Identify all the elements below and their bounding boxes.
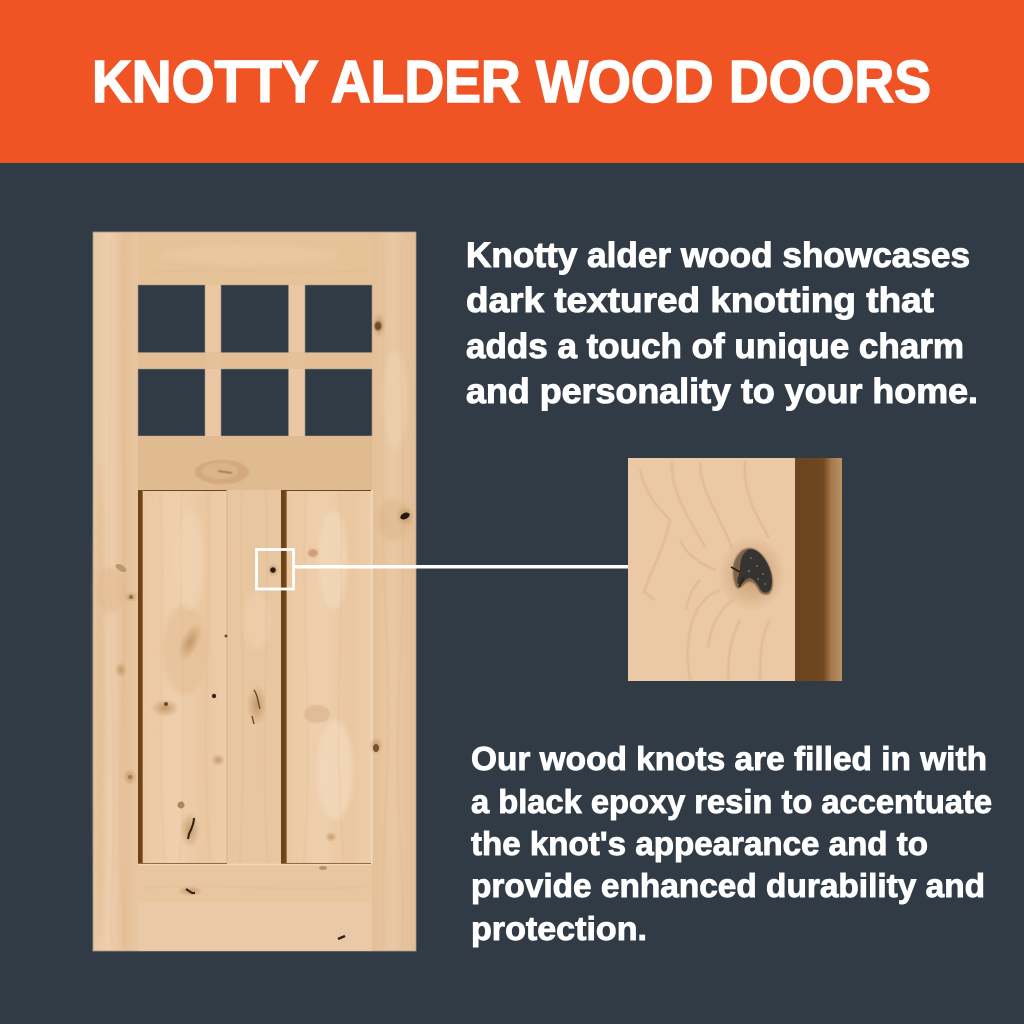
door body xyxy=(93,232,416,951)
right stile xyxy=(372,233,415,950)
knot close-up xyxy=(628,458,842,681)
lock rail xyxy=(138,436,372,490)
window panes xyxy=(138,285,372,436)
highlight square xyxy=(256,550,294,589)
title: KNOTTY ALDER WOOD DOORS xyxy=(92,49,931,115)
lower description: a black epoxy resin to accentuate xyxy=(471,783,992,820)
header banner xyxy=(0,0,1024,163)
window muntins xyxy=(138,285,372,436)
lower panels xyxy=(138,490,372,864)
top rail xyxy=(138,233,372,285)
close-up knot xyxy=(718,536,786,612)
lock rail knot xyxy=(195,460,249,484)
lower description xyxy=(471,740,992,947)
wood mottling xyxy=(94,245,413,940)
left stile xyxy=(94,233,138,950)
lower description: provide enhanced durability and xyxy=(471,867,985,904)
wood grain xyxy=(109,240,403,948)
connector line xyxy=(294,565,628,568)
lower description: protection. xyxy=(471,910,647,947)
close-up grain xyxy=(640,460,770,680)
upper description: dark textured knotting that xyxy=(466,281,934,320)
lower description: Our wood knots are filled in with xyxy=(471,740,987,777)
upper description: and personality to your home. xyxy=(466,372,978,411)
door illustration xyxy=(93,232,416,951)
lower description: the knot's appearance and to xyxy=(471,825,928,862)
close-up edge shadow xyxy=(795,458,842,681)
upper description: adds a touch of unique charm xyxy=(466,327,964,366)
door knots xyxy=(114,312,414,939)
close-up wood xyxy=(628,458,795,681)
callout marker and connector xyxy=(256,550,628,589)
bottom rail xyxy=(138,864,372,951)
upper description: Knotty alder wood showcases xyxy=(466,236,970,275)
upper description xyxy=(466,236,978,411)
